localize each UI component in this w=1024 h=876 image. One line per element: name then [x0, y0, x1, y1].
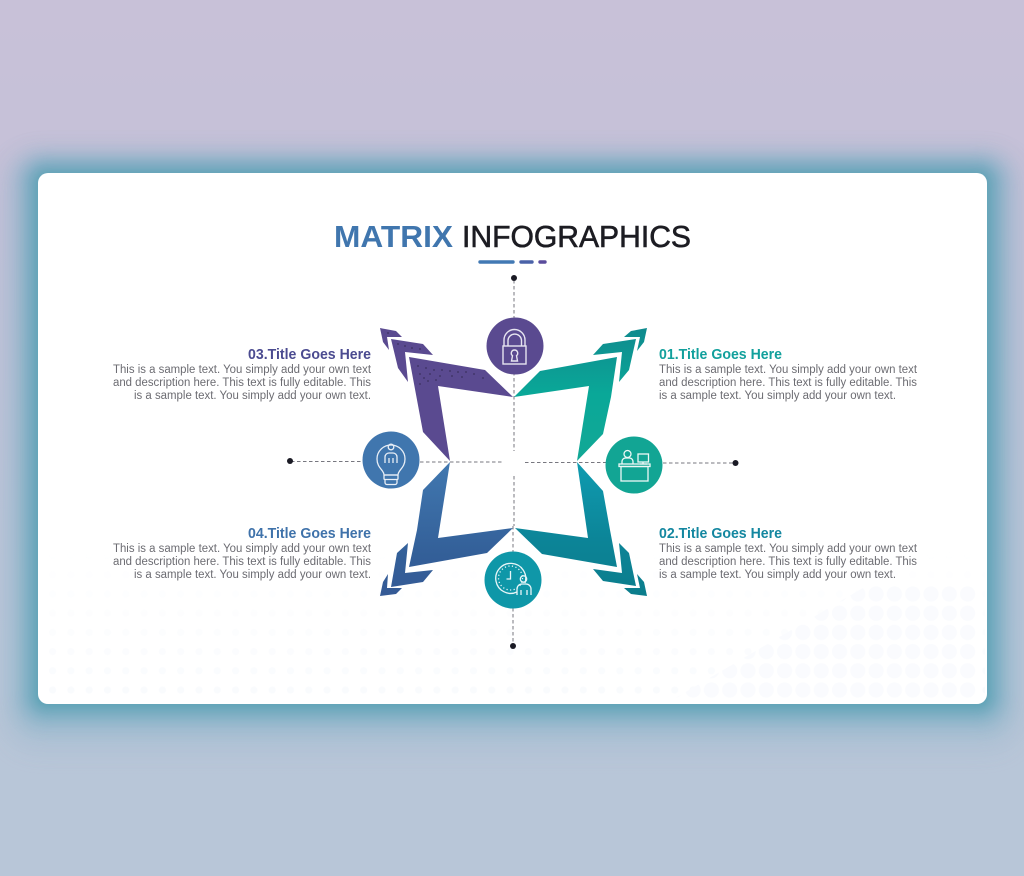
arrow shape: top-left purple	[380, 328, 513, 461]
text block: 04	[113, 526, 372, 581]
icon: person at desk	[606, 436, 662, 494]
arrow shape: bottom-left blue	[380, 462, 513, 596]
text block: 04: 04.Title Goes Here	[248, 526, 371, 542]
title underline	[480, 260, 545, 264]
arrow shape: bottom-right cyan	[515, 462, 647, 596]
title	[334, 219, 691, 254]
dashed guide lines	[287, 275, 738, 649]
text block: 01: This is a sample text. You simply add your own text	[659, 364, 918, 376]
title: INFOGRAPHICS	[462, 219, 691, 254]
icon: padlock	[486, 318, 544, 374]
text block: 04: and description here. This text is fully editable. This	[113, 556, 371, 568]
text block: 03: 03.Title Goes Here	[248, 347, 371, 363]
text block: 04: This is a sample text. You simply add your own text	[113, 543, 372, 555]
text block: 01: 01.Title Goes Here	[659, 347, 782, 363]
text block: 01	[659, 347, 918, 402]
infographic canvas	[113, 226, 917, 649]
text block: 02	[659, 526, 918, 581]
icon: light bulb with person	[362, 432, 420, 488]
text block: 02: This is a sample text. You simply add your own text	[659, 543, 918, 555]
arrow shape: top-right teal	[514, 328, 647, 461]
text block: 03: This is a sample text. You simply add your own text	[113, 364, 372, 376]
text block: 02: and description here. This text is fully editable. This	[659, 556, 917, 568]
text block: 01: is a sample text. You simply add your own text.	[659, 390, 896, 402]
text block: 03: is a sample text. You simply add your own text.	[134, 390, 371, 402]
white slide card	[38, 173, 987, 704]
halftone dot background	[40, 540, 985, 700]
text block: 03: and description here. This text is fully editable. This	[113, 377, 371, 389]
text block: 04: is a sample text. You simply add your own text.	[134, 569, 371, 581]
text block: 02: 02.Title Goes Here	[659, 526, 782, 542]
icon: clock gauge with person	[484, 552, 542, 608]
text block: 02: is a sample text. You simply add your own text.	[659, 569, 896, 581]
title: MATRIX	[334, 219, 453, 254]
text block: 01: and description here. This text is fully editable. This	[659, 377, 917, 389]
text block: 03	[113, 347, 372, 402]
